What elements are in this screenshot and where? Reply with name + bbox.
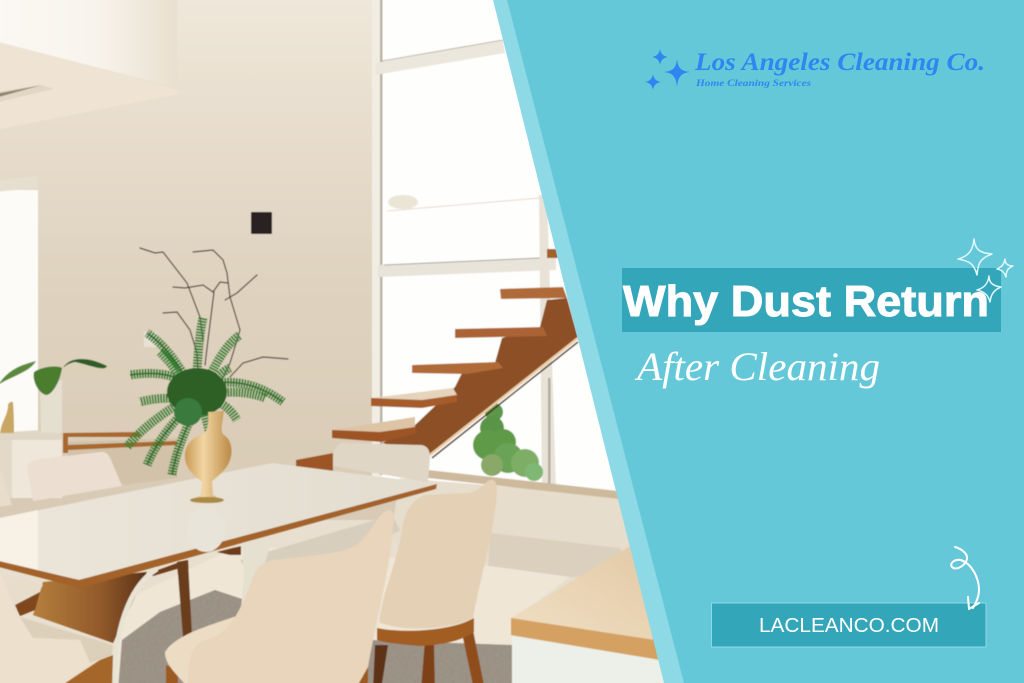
floor	[110, 545, 570, 683]
bottom-left chairs	[0, 570, 113, 683]
left side table and plant	[0, 359, 107, 498]
vase reflection	[187, 508, 225, 552]
rug	[118, 590, 512, 683]
ceiling soffit	[0, 0, 177, 130]
console behind table	[63, 432, 177, 485]
photo: dining room interior	[0, 0, 668, 683]
curly arrow	[951, 547, 979, 609]
title bar	[622, 268, 1001, 332]
photo backdrop	[0, 0, 700, 683]
logo tagline: Home Cleaning Services	[695, 79, 811, 89]
blue panel	[507, 0, 1024, 683]
gold vase	[185, 411, 232, 503]
wall	[0, 0, 400, 520]
front dining chair	[165, 510, 394, 683]
left window	[0, 176, 38, 435]
logo	[645, 49, 985, 90]
website text: LACLEANCO.COM	[759, 615, 939, 637]
subtitle: After Cleaning	[634, 344, 880, 389]
large window	[372, 0, 632, 500]
light blue diagonal stripe	[493, 0, 1024, 683]
branches	[140, 248, 288, 380]
middle dining chair	[373, 480, 497, 683]
table base	[33, 537, 273, 683]
distant wall line outside window	[387, 198, 540, 211]
wall under table	[240, 515, 400, 590]
logo sparkle icons	[645, 49, 690, 90]
logo name: Los Angeles Cleaning Co.	[694, 49, 985, 76]
light switch	[144, 332, 157, 347]
table top	[0, 463, 437, 588]
sideboard	[511, 545, 668, 683]
wall sconce	[251, 212, 272, 234]
back chairs	[0, 443, 430, 507]
website button	[712, 603, 986, 647]
fern fronds	[127, 318, 283, 475]
tree outside	[473, 403, 543, 481]
wall and floor under window	[390, 470, 650, 600]
title: Why Dust Return	[623, 277, 989, 326]
staircase	[296, 249, 578, 471]
sparkle icons	[958, 239, 1013, 302]
